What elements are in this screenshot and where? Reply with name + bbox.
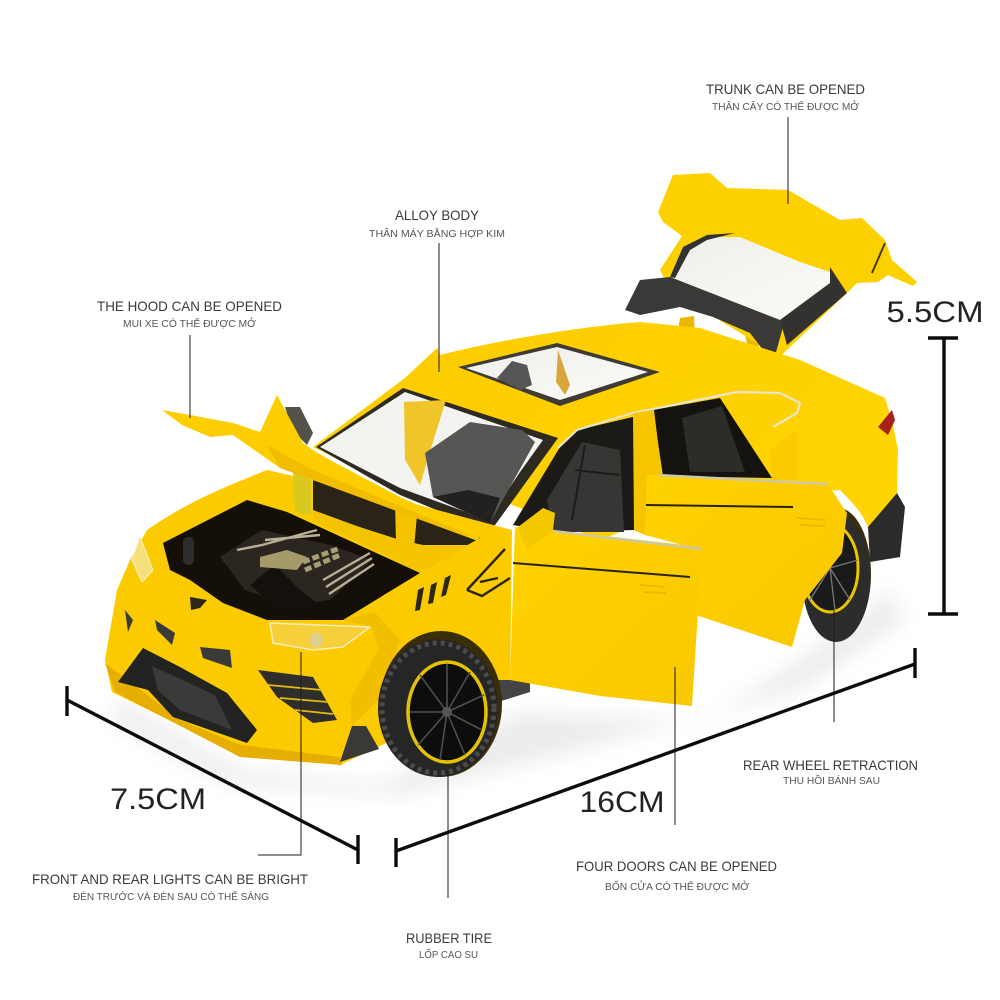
gold panel	[260, 550, 307, 570]
width value: 7.5CM	[110, 783, 206, 816]
label: lights: FRONT AND REAR LIGHTS CAN BE BRIGHT	[32, 871, 308, 887]
length value: 16CM	[580, 786, 664, 819]
hood	[162, 395, 480, 541]
trunk lid	[625, 173, 917, 368]
label: alloy body	[369, 207, 505, 240]
rim	[802, 524, 858, 612]
door handle	[640, 585, 666, 593]
gold blocks	[303, 548, 340, 570]
air intake	[250, 565, 320, 612]
spokes	[410, 664, 484, 760]
label: hood	[97, 298, 282, 330]
struts	[676, 316, 766, 368]
main headlight	[270, 623, 370, 650]
lamp	[309, 633, 323, 647]
label: four doors	[576, 858, 777, 893]
windshield	[316, 388, 558, 532]
emblem	[190, 597, 207, 610]
engine cover	[220, 530, 372, 605]
label: rear wheel: REAR WHEEL RETRACTION	[743, 757, 918, 773]
glass	[320, 392, 543, 520]
fender shading	[343, 612, 400, 726]
bay base	[163, 500, 420, 620]
front fascia	[105, 537, 510, 765]
tire line	[447, 770, 449, 898]
sunroof	[458, 343, 660, 406]
label: lights	[32, 871, 308, 903]
rear wheel	[802, 508, 871, 642]
label: trunk	[706, 81, 865, 113]
label: rear wheel	[743, 757, 918, 787]
label: rear wheel: THU HỒI BÁNH SAU	[783, 774, 880, 787]
tread	[382, 643, 494, 773]
trunk panel	[658, 173, 917, 363]
vent strips	[268, 685, 333, 714]
far grille	[125, 610, 133, 632]
lights line	[258, 652, 301, 855]
fender arrow	[467, 549, 510, 596]
mirror	[518, 508, 555, 550]
black seal left	[670, 233, 735, 278]
label: hood: MUI XE CÓ THỂ ĐƯỢC MỞ	[123, 317, 256, 330]
doors line	[674, 667, 676, 825]
tire	[802, 514, 870, 642]
hood hinge	[285, 407, 313, 445]
label: rubber tire: LỐP CAO SU	[419, 947, 478, 961]
frame	[316, 388, 558, 532]
bumper lip	[105, 663, 342, 765]
label: four doors: FOUR DOORS CAN BE OPENED	[576, 858, 777, 874]
upper grille right	[200, 647, 232, 668]
side vent	[258, 670, 337, 723]
wheel arch	[380, 631, 502, 777]
label: lights: ĐÈN TRƯỚC VÀ ĐÈN SAU CÓ THỂ SÁNG	[73, 890, 269, 903]
rear bumper	[868, 493, 905, 562]
wheel arch	[805, 508, 871, 640]
front body	[105, 470, 512, 765]
main grille	[118, 648, 257, 743]
tire	[378, 639, 498, 777]
door line	[646, 505, 793, 507]
front splitter	[340, 726, 379, 762]
ground shadow	[110, 590, 905, 795]
dimension: height 5.5cm	[886, 296, 984, 614]
alloy line	[438, 243, 440, 372]
interior door	[404, 400, 446, 485]
seat	[425, 422, 535, 523]
label: rubber tire: RUBBER TIRE	[406, 930, 492, 946]
dimension: width 7.5cm	[67, 686, 358, 864]
front seat	[547, 442, 624, 532]
label: hood: THE HOOD CAN BE OPENED	[97, 298, 282, 314]
trunk glass	[670, 237, 830, 320]
label: alloy body: ALLOY BODY	[395, 207, 480, 223]
label: rubber tire	[406, 930, 492, 961]
main body roof and rear	[313, 322, 898, 540]
hood under shade	[267, 445, 470, 537]
sill	[498, 680, 530, 702]
black band	[625, 277, 783, 363]
label: four doors: BỐN CỬA CÓ THỂ ĐƯỢC MỞ	[605, 879, 749, 893]
rim	[408, 662, 486, 762]
tail light	[878, 410, 895, 435]
bay ledge	[313, 510, 470, 573]
rear door	[645, 475, 847, 647]
oil cap	[183, 537, 194, 565]
grille mesh	[152, 666, 232, 730]
door top trim	[657, 475, 827, 484]
seat base	[433, 490, 500, 523]
door line	[513, 563, 690, 577]
callout lines	[190, 117, 834, 898]
rear seat	[682, 406, 745, 472]
door handle	[797, 518, 825, 526]
b pillar	[633, 410, 662, 535]
inner strut	[395, 500, 417, 548]
label: trunk: THÂN CÂY CÓ THỂ ĐƯỢC MỞ	[712, 100, 859, 113]
hood line	[189, 335, 191, 418]
engine bay	[163, 500, 420, 620]
model car	[105, 173, 917, 795]
label: alloy body: THÂN MÁY BẰNG HỢP KIM	[369, 227, 505, 240]
height value: 5.5CM	[886, 296, 984, 329]
fender vents	[415, 575, 451, 611]
label: trunk: TRUNK CAN BE OPENED	[706, 81, 865, 97]
under hood interior	[313, 480, 480, 552]
front door	[510, 508, 702, 706]
dimension: length 16cm	[396, 648, 915, 867]
rear wheel line	[833, 610, 835, 722]
upper grille left	[155, 620, 175, 645]
model script	[872, 243, 885, 273]
left headlight	[132, 537, 153, 582]
hood support strut	[293, 470, 311, 515]
front wheel	[378, 631, 502, 777]
front side window opening	[513, 417, 636, 532]
door top trim	[553, 531, 702, 549]
silver chevrons	[237, 530, 374, 594]
black seal right	[780, 267, 847, 345]
window trim	[558, 392, 800, 448]
trunk line	[787, 117, 789, 204]
rear side window opening	[653, 398, 797, 480]
